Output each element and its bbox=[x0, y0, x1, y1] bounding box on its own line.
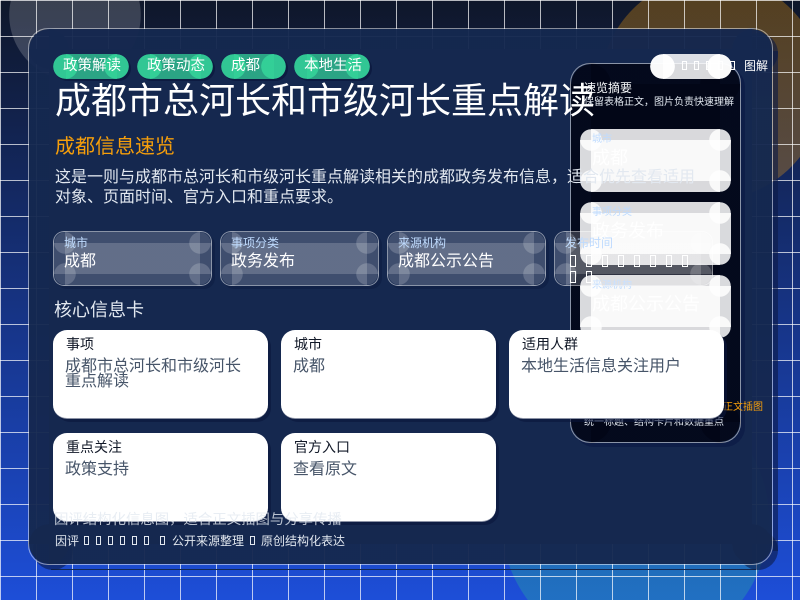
info card: item bbox=[53, 330, 268, 419]
metric label: 事项分类 bbox=[231, 236, 279, 250]
top right badge text: 图解 bbox=[744, 59, 768, 73]
side card label: 城市 bbox=[592, 134, 612, 145]
chip: 政策动态 bbox=[147, 58, 205, 74]
metric value bbox=[570, 255, 688, 283]
side footer note: 统一标题、结构卡片和数据重点 bbox=[584, 417, 724, 428]
side card: source bbox=[580, 275, 731, 338]
info card: city bbox=[281, 330, 496, 419]
footer source line bbox=[55, 534, 345, 548]
metric value: 成都 bbox=[64, 253, 96, 270]
chip: 政策解读 bbox=[63, 58, 121, 74]
info card: audience bbox=[509, 330, 724, 419]
metric label: 来源机构 bbox=[398, 236, 446, 250]
info card: focus bbox=[53, 433, 268, 522]
metric: publish time bbox=[554, 231, 713, 286]
card value: 查看原文 bbox=[293, 461, 357, 478]
title: 成都市总河长和市级河长重点解读 bbox=[55, 80, 595, 121]
side card label: 事项分类 bbox=[592, 207, 632, 218]
side subheading: 保留表格正文，图片负责快速理解 bbox=[584, 97, 734, 108]
description: 对象、页面时间、官方入口和重点要求。 bbox=[55, 188, 343, 206]
section heading: 核心信息卡 bbox=[54, 300, 144, 320]
chip bbox=[53, 54, 129, 79]
top right badge bbox=[650, 54, 732, 79]
side panel body bbox=[570, 63, 741, 443]
card value: 重点解读 bbox=[65, 373, 129, 390]
metric label: 发布时间 bbox=[565, 236, 613, 250]
panel: side summary bbox=[570, 63, 763, 447]
footer caption: 因评结构化信息图，适合正文插图与分享传播 bbox=[54, 512, 342, 528]
metric value: 政务发布 bbox=[231, 253, 295, 270]
side card label: 来源机构 bbox=[592, 280, 632, 291]
metric: source bbox=[387, 231, 546, 286]
chip: 成都 bbox=[231, 58, 260, 74]
footer source line: 原创结构化表达 bbox=[261, 534, 345, 548]
metric: city bbox=[53, 231, 212, 286]
card value: 政策支持 bbox=[65, 461, 129, 478]
metric: category bbox=[220, 231, 379, 286]
card value bbox=[65, 357, 241, 390]
side card value: 成都公示公告 bbox=[592, 294, 700, 314]
info card: official entry bbox=[281, 433, 496, 522]
subtitle: 成都信息速览 bbox=[55, 136, 175, 158]
side card: city bbox=[580, 129, 731, 192]
card title: 城市 bbox=[294, 336, 322, 352]
side card: category bbox=[580, 202, 731, 265]
side card value: 成都 bbox=[592, 148, 628, 168]
footer source line: 公开来源整理 bbox=[172, 534, 244, 548]
card title: 重点关注 bbox=[66, 439, 122, 455]
chip bbox=[137, 54, 213, 79]
description bbox=[55, 168, 695, 206]
background circle: top left bbox=[9, 0, 141, 81]
background circle: top right orange bbox=[600, 0, 800, 200]
chip bbox=[221, 54, 286, 79]
side card value: 政务发布 bbox=[592, 221, 664, 241]
footer source line: 因评 bbox=[55, 534, 79, 548]
side heading: 速览摘要 bbox=[584, 81, 632, 95]
chip: 本地生活 bbox=[304, 58, 362, 74]
card value: 成都 bbox=[293, 358, 325, 375]
tag chips bbox=[53, 54, 372, 81]
metric value: 成都公示公告 bbox=[398, 253, 494, 270]
card title: 官方入口 bbox=[294, 439, 350, 455]
card title: 适用人群 bbox=[522, 336, 578, 352]
metric label: 城市 bbox=[64, 236, 88, 250]
card title: 事项 bbox=[66, 336, 94, 352]
chip bbox=[294, 54, 370, 79]
side orange note: 适合正文插图 bbox=[703, 402, 763, 413]
top right badge text bbox=[682, 59, 768, 73]
card value: 本地生活信息关注用户 bbox=[521, 358, 681, 375]
background circle: bottom blue bbox=[501, 386, 769, 600]
card value: 成都市总河长和市级河长 bbox=[65, 358, 241, 375]
description: 这是一则与成都市总河长和市级河长重点解读相关的成都政务发布信息，适合优先查看适用 bbox=[55, 169, 695, 186]
